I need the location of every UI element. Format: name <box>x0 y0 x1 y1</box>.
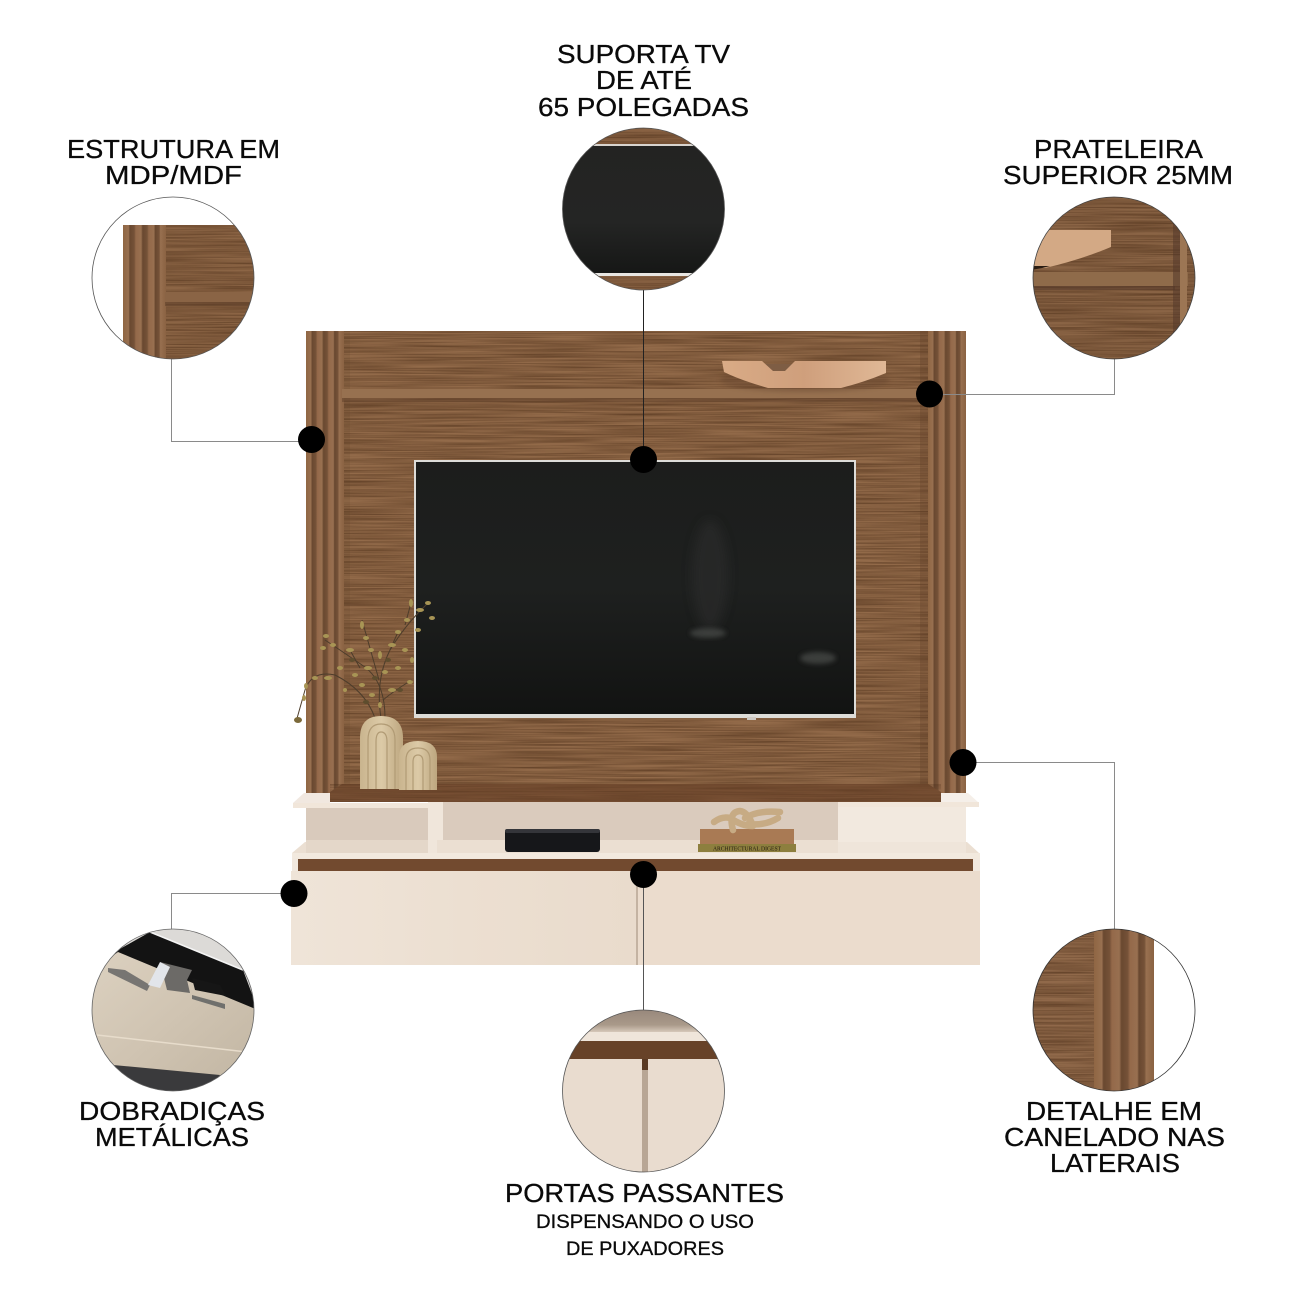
decor: tv box <box>505 829 600 852</box>
callout lines <box>172 290 1114 1010</box>
detail circle: TV <box>560 126 728 294</box>
heading: hinges: METÁLICAS <box>95 1122 249 1152</box>
heading: fluted detail: LATERAIS <box>1050 1148 1180 1178</box>
lower wood shelf <box>330 784 941 802</box>
heading: sliding doors: DE PUXADORES <box>566 1239 724 1260</box>
wood strip above doors <box>292 858 980 872</box>
heading: TV support <box>538 39 749 122</box>
heading: fluted detail <box>1004 1096 1225 1178</box>
decor: plant branches <box>294 599 435 723</box>
heading: structure: ESTRUTURA EM <box>67 134 280 164</box>
heading: TV support: 65 POLEGADAS <box>538 92 749 122</box>
heading: upper shelf: SUPERIOR 25MM <box>1003 160 1233 190</box>
decor: ceramic bowl on shelf <box>720 361 890 392</box>
heading: hinges: DOBRADIÇAS <box>79 1096 265 1126</box>
heading: structure: MDP/MDF <box>105 160 242 190</box>
heading: TV support: SUPORTA TV <box>557 39 731 69</box>
heading: TV support: DE ATÉ <box>596 65 692 95</box>
television <box>414 460 856 720</box>
callout dots <box>280 380 976 907</box>
heading: hinges <box>79 1096 265 1152</box>
detail circle: hinges <box>90 925 258 1095</box>
furniture: TV wall panel with rack <box>291 331 980 965</box>
decor: books with knot sculpture <box>698 811 796 852</box>
heading: sliding doors: PORTAS PASSANTES <box>505 1178 784 1208</box>
detail circle: fluted sides <box>1030 925 1200 1095</box>
doors <box>291 871 980 965</box>
heading: upper shelf <box>1003 134 1233 190</box>
heading: sliding doors <box>505 1178 784 1260</box>
heading: structure <box>67 134 280 190</box>
decor: books with knot sculpture: ARCHITECTURAL DIGEST <box>713 846 781 852</box>
heading: fluted detail: DETALHE EM <box>1026 1096 1202 1126</box>
rack: cream niches and shelves <box>292 793 980 859</box>
detail circle: MDP/MDF structure <box>90 195 258 363</box>
heading: sliding doors: DISPENSANDO O USO <box>536 1212 754 1233</box>
heading: upper shelf: PRATELEIRA <box>1034 134 1204 164</box>
decor: ribbed vases <box>360 716 437 790</box>
shelf: upper wood shelf <box>342 389 930 410</box>
panel: wood backboard <box>306 331 966 801</box>
detail circle: upper shelf <box>1030 195 1198 363</box>
heading: fluted detail: CANELADO NAS <box>1004 1122 1225 1152</box>
detail circle: doors <box>560 1008 728 1174</box>
